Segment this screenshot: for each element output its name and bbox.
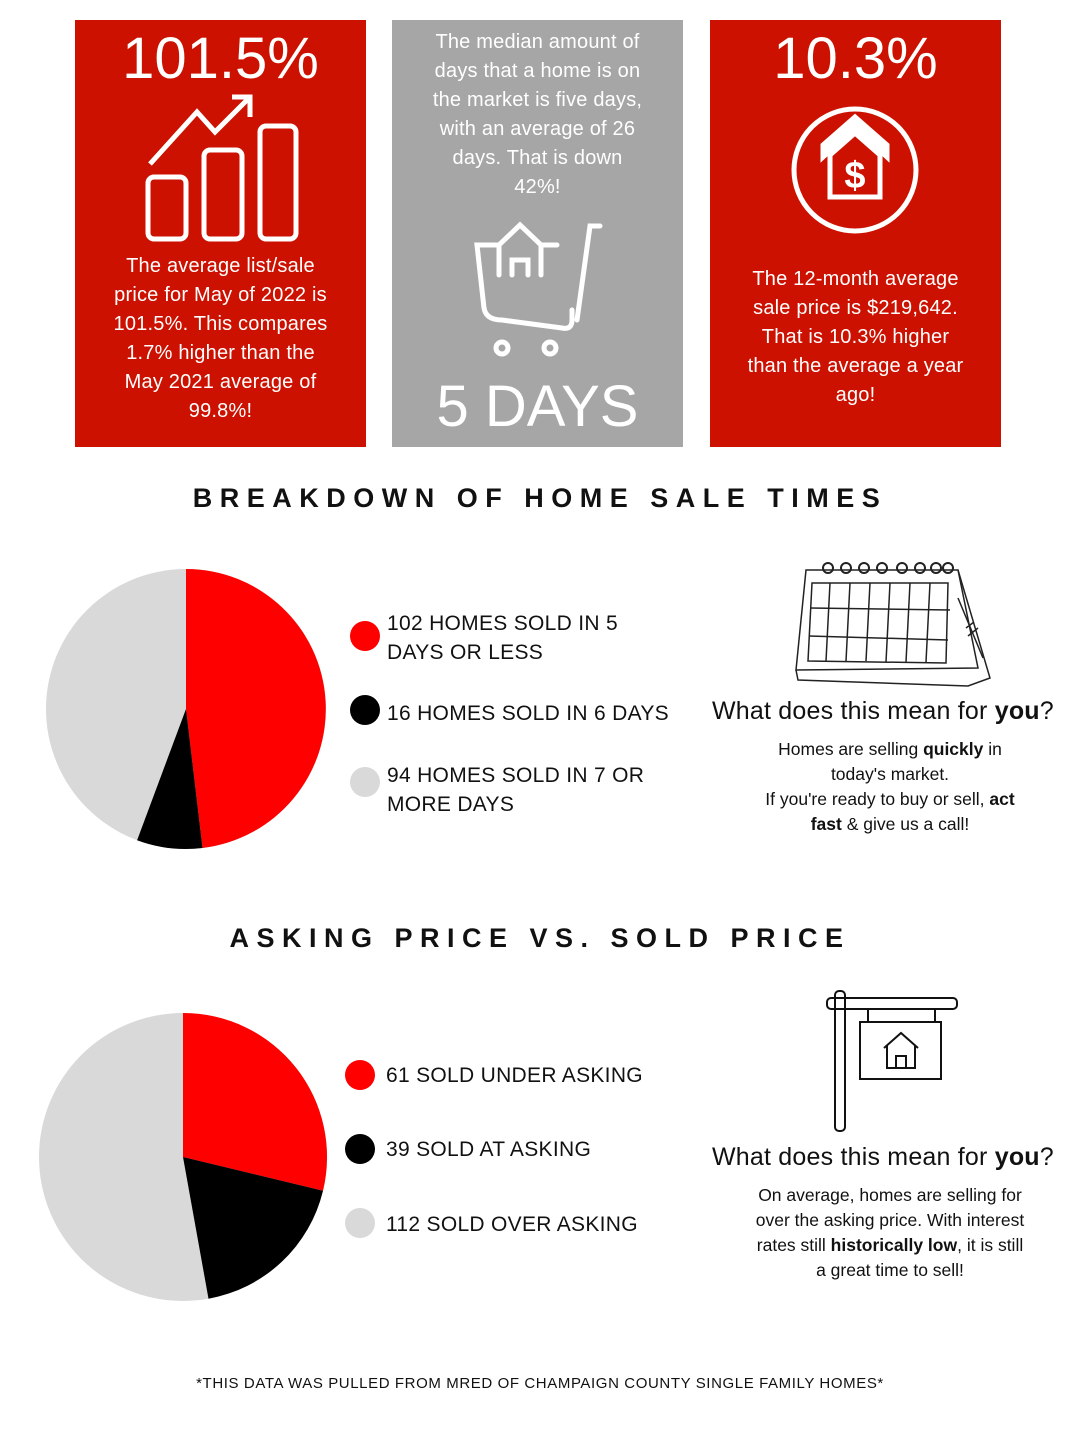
text: description: May 2021 average of — [125, 371, 316, 393]
text: meaning 1: If you're ready to buy or sell, act — [765, 789, 1015, 809]
legend: asking vs sold — [345, 1060, 643, 1238]
stat: 5 DAYS: 5 DAYS — [436, 374, 638, 439]
legend: sale times: MORE DAYS — [387, 793, 514, 816]
text: meaning 2: a great time to sell! — [816, 1260, 964, 1280]
text: meaning 1: fast & give us a call! — [811, 814, 969, 834]
legend: asking vs sold: 112 SOLD OVER ASKING — [386, 1213, 638, 1236]
icon: for-sale sign — [826, 990, 958, 1132]
text: meaning 2: over the asking price. With interest — [756, 1210, 1024, 1230]
text: description — [748, 268, 963, 406]
icon: house with dollar in circle — [792, 106, 918, 234]
question heading 1: What does this mean for you? — [712, 697, 1054, 725]
question heading 2: What does this mean for you? — [712, 1143, 1054, 1171]
legend: sale times: 94 HOMES SOLD IN 7 OR — [387, 764, 644, 787]
icon: shopping cart with house — [474, 222, 602, 356]
stat: 10.3%: 10.3% — [773, 26, 938, 91]
pie chart: sale times — [46, 569, 326, 849]
text: description: days. That is down — [452, 147, 622, 169]
text: description: ago! — [836, 384, 875, 406]
text: description: 101.5%. This compares — [114, 313, 327, 335]
text: meaning 1: Homes are selling quickly in — [778, 739, 1002, 759]
text: description: days that a home is on — [435, 60, 640, 82]
card: list/sale price — [75, 20, 366, 447]
card: average sale price — [710, 20, 1001, 447]
text: description: 42%! — [514, 176, 561, 198]
text: meaning 2: On average, homes are selling for — [758, 1185, 1022, 1205]
text: meaning 1 — [765, 739, 1015, 834]
icon: growth bar chart — [146, 94, 298, 242]
legend: asking vs sold: 39 SOLD AT ASKING — [386, 1138, 591, 1161]
text: description: than the average a year — [748, 355, 963, 377]
text: description — [114, 255, 327, 422]
text: description: 99.8%! — [189, 400, 252, 422]
text: description: That is 10.3% higher — [762, 326, 949, 348]
text: meaning 2: rates still historically low, it is still — [757, 1235, 1023, 1255]
icon: calendar — [795, 562, 991, 687]
text: meaning 1: today's market. — [831, 764, 949, 784]
legend: sale times — [350, 612, 669, 816]
pie chart: asking vs sold — [39, 1013, 328, 1301]
footnote: *THIS DATA WAS PULLED FROM MRED OF CHAMPAIGN COUNTY SINGLE FAMILY HOMES* — [196, 1375, 884, 1392]
text: description — [433, 31, 642, 198]
text: description: price for May of 2022 is — [114, 284, 327, 306]
stat: 101.5%: 101.5% — [122, 26, 319, 91]
legend: sale times: 16 HOMES SOLD IN 6 DAYS — [387, 702, 669, 725]
card: days on market — [392, 20, 683, 447]
legend: asking vs sold: 61 SOLD UNDER ASKING — [386, 1064, 643, 1087]
text: meaning 2 — [756, 1185, 1024, 1280]
text: description: The average list/sale — [126, 255, 315, 277]
icon: house with dollar in circle: $ — [844, 155, 866, 197]
text: description: with an average of 26 — [440, 118, 635, 140]
text: description: 1.7% higher than the — [126, 342, 315, 364]
legend: sale times: 102 HOMES SOLD IN 5 — [387, 612, 618, 635]
text: description: The median amount of — [435, 31, 640, 53]
legend: sale times: DAYS OR LESS — [387, 641, 543, 664]
text: description: The 12-month average — [752, 268, 959, 290]
text: description: sale price is $219,642. — [753, 297, 958, 319]
heading: breakdown of home sale times: BREAKDOWN OF HOME SALE TIMES — [193, 483, 887, 513]
heading: asking vs sold: ASKING PRICE VS. SOLD PRICE — [229, 923, 851, 953]
text: description: the market is five days, — [433, 89, 642, 111]
